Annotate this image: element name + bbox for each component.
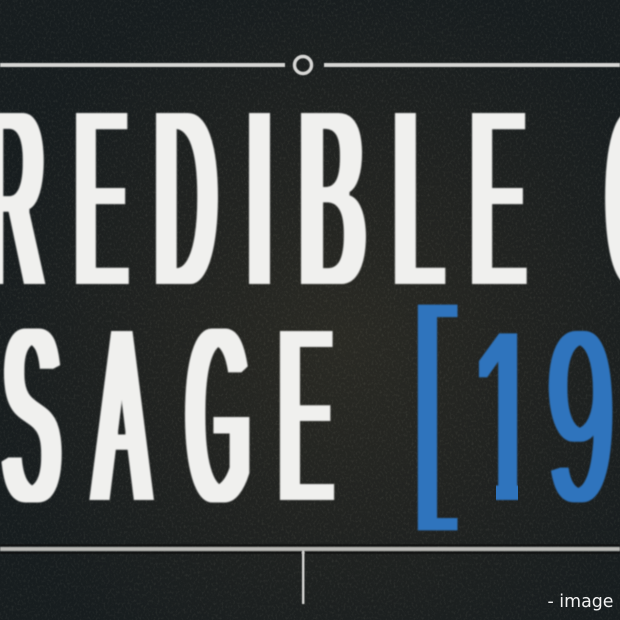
title line 2: SAGE: E: [280, 277, 331, 556]
title line 1: REDIBLE C: L: [394, 56, 442, 339]
blue digit 1: 1: [471, 278, 540, 555]
title line 2: SAGE: G: [188, 276, 249, 555]
title line 1: REDIBLE C: E: [472, 57, 524, 340]
title line 1: REDIBLE C: I: [248, 58, 271, 340]
title line 1: REDIBLE C: E: [76, 57, 125, 340]
title line 1: REDIBLE C: B: [300, 56, 365, 340]
title line 2: SAGE: A: [95, 276, 148, 555]
title line 1: REDIBLE C: [0, 56, 620, 340]
bottom ornament: rule with tick: [0, 544, 620, 604]
blue opening bracket: [: [407, 258, 457, 533]
top ornament: rule with ring: [0, 56, 620, 74]
caption: - image: [548, 592, 613, 612]
blue digit 9: 9: [547, 278, 614, 555]
title line 1: REDIBLE C: D: [156, 57, 215, 339]
title line 2: SAGE: S: [4, 276, 59, 555]
title line 2: SAGE: [4, 276, 331, 556]
